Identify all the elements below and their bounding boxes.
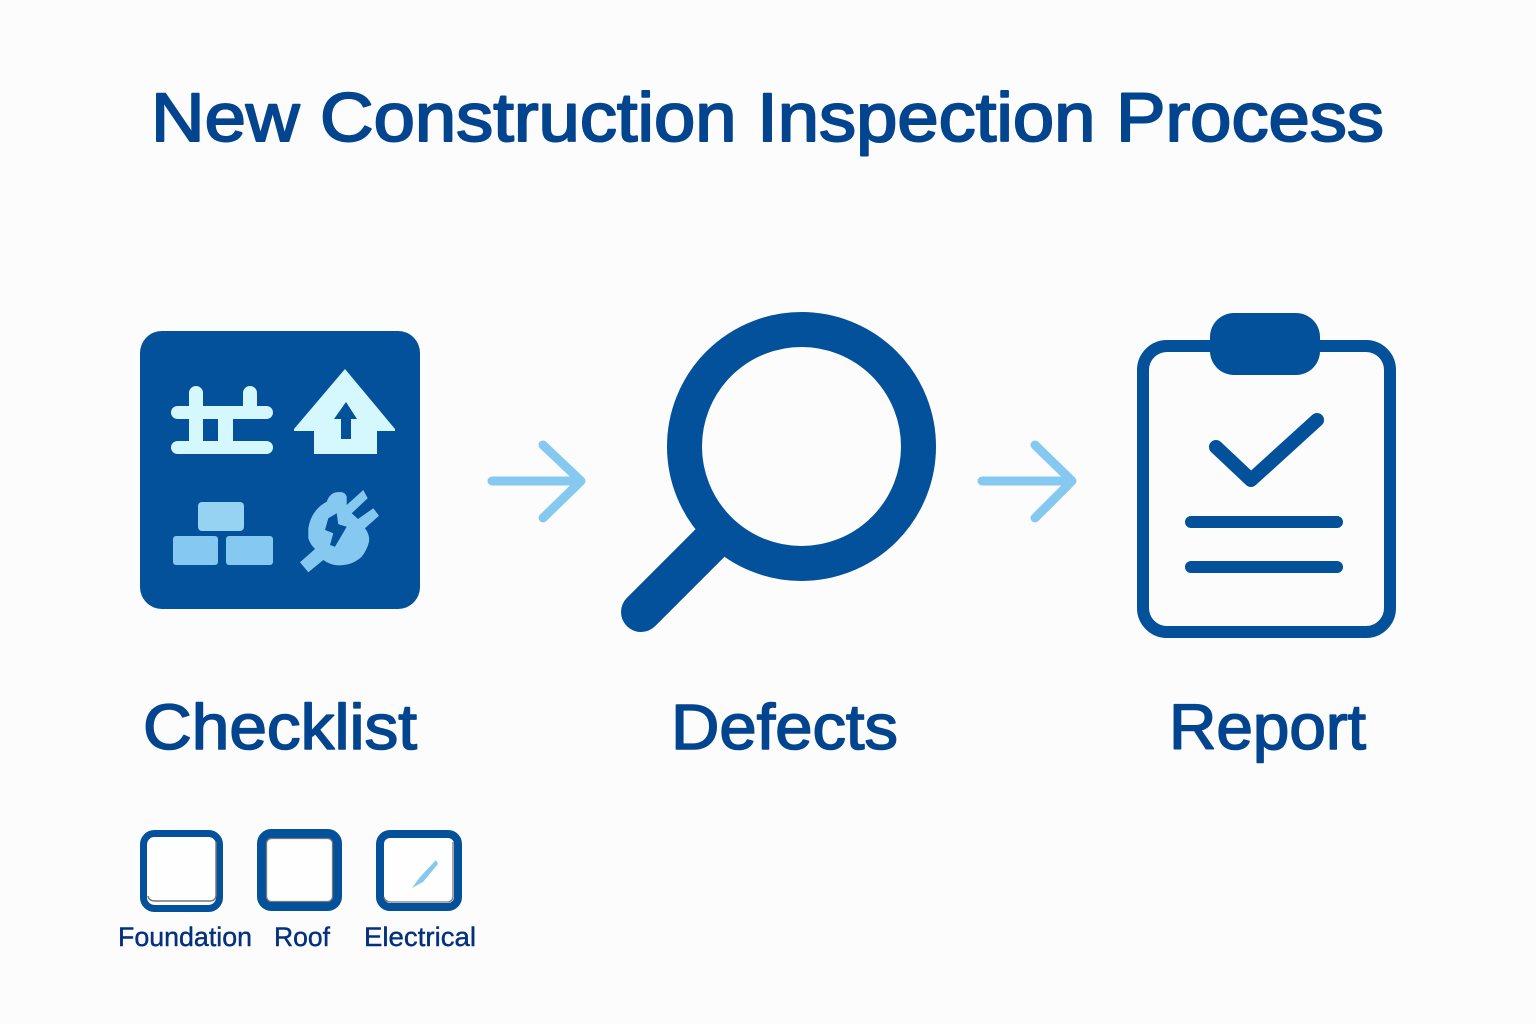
icon: bricks: [173, 502, 273, 565]
heading: checklist: Checklist: [143, 691, 417, 763]
label: foundation: Foundation: [118, 922, 252, 952]
checkbox: electrical: [364, 834, 476, 952]
icon: report clipboard: [1143, 313, 1390, 632]
heading: defects: Defects: [671, 691, 898, 763]
icon: magnifying glass: [641, 330, 918, 612]
heading: report: Report: [1169, 691, 1366, 763]
panel: checklist categories tile: [140, 331, 420, 609]
title: New Construction Inspection Process: [151, 79, 1384, 156]
arrow: checklist to defects: [492, 445, 581, 518]
icon: electrical plug: [300, 490, 379, 572]
label: roof: Roof: [274, 922, 331, 952]
icon: roof house: [294, 369, 395, 454]
checkbox: foundation: [118, 834, 252, 952]
label: electrical: Electrical: [364, 922, 476, 952]
arrow: defects to report: [982, 445, 1072, 518]
mark: partial check: [412, 860, 438, 888]
checkbox: roof: [262, 834, 338, 952]
icon: foundation: [171, 386, 273, 454]
